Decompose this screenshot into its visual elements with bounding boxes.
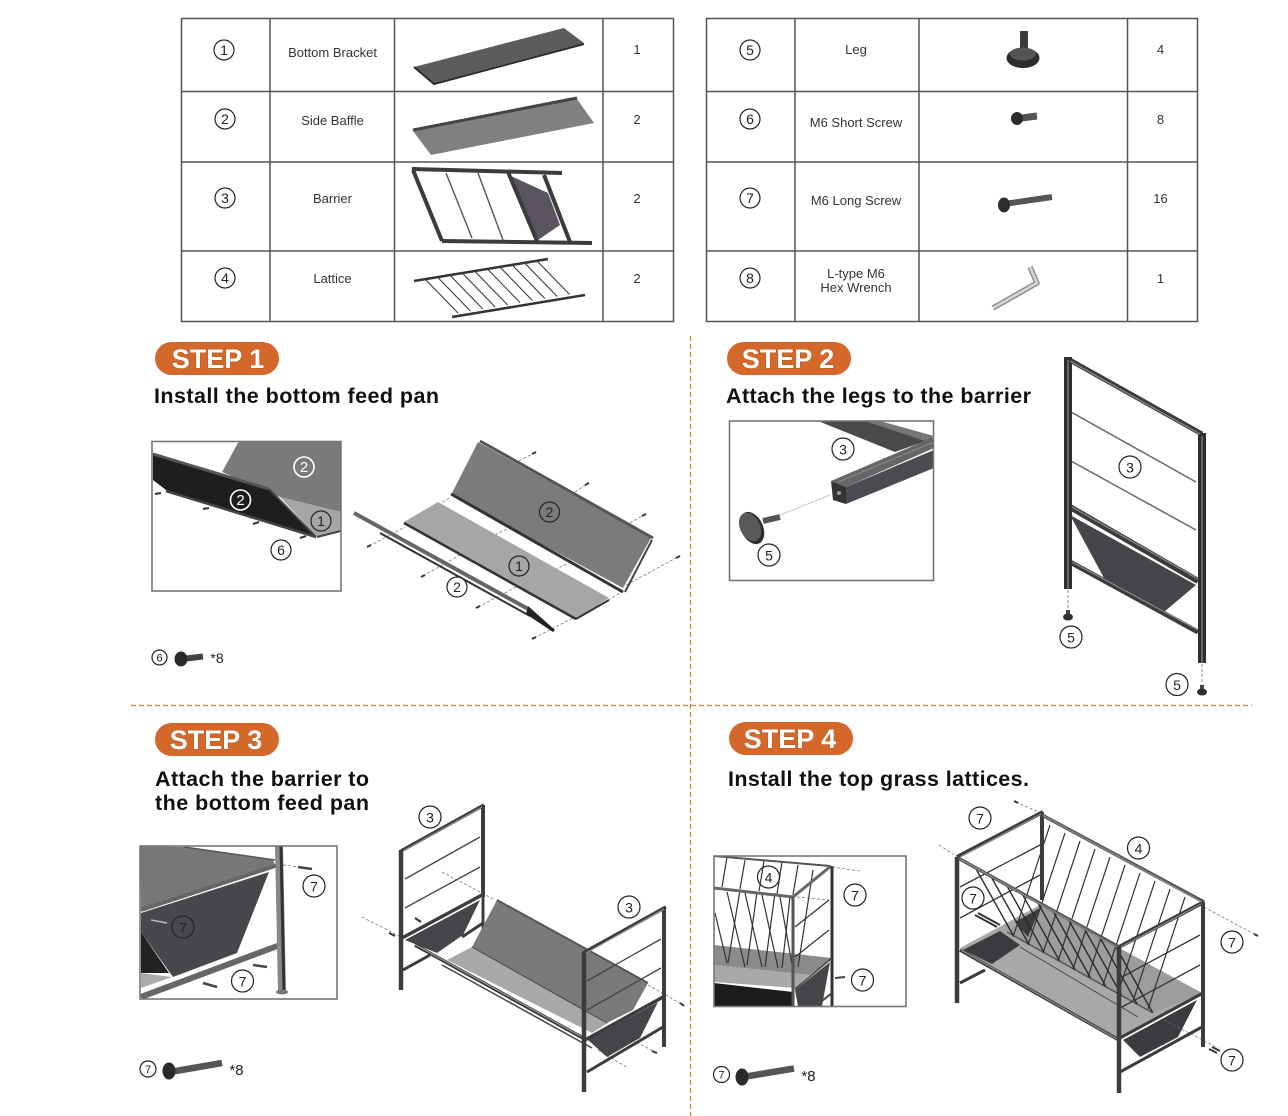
part 5 row: 4 bbox=[1157, 42, 1164, 57]
part 2 row: 2 bbox=[633, 112, 641, 127]
part 4 row: 4 bbox=[221, 270, 229, 286]
step 1 inset detail: 2 bbox=[300, 459, 308, 476]
step 1 badge: STEP 1 bbox=[172, 344, 264, 374]
panel: step 2 bbox=[726, 342, 1207, 696]
part 7 row: 7 bbox=[746, 190, 754, 206]
separators bbox=[131, 336, 1252, 1116]
step 1 inset detail: 2 bbox=[236, 492, 245, 509]
step 4 assembled view bbox=[939, 801, 1258, 1093]
part 1 row: 1 bbox=[633, 42, 641, 57]
step 1 hardware legend bbox=[152, 650, 224, 666]
step 3 assembled view: 3 bbox=[625, 900, 633, 916]
step 4 hardware legend: *8 bbox=[801, 1068, 816, 1085]
step 3 hardware legend: *8 bbox=[229, 1062, 244, 1079]
part 7 row bbox=[740, 188, 1168, 212]
leg left bbox=[1063, 610, 1073, 620]
step 4 assembled view: 7 bbox=[1228, 1052, 1236, 1068]
part 4 row: Lattice bbox=[313, 271, 352, 286]
step 4 badge: STEP 4 bbox=[744, 724, 836, 754]
step 4 hardware legend bbox=[714, 1066, 816, 1086]
step 3 assembled view: 3 bbox=[426, 810, 434, 826]
step 1 hardware legend: 6 bbox=[156, 652, 163, 664]
panel: step 4 bbox=[714, 722, 1258, 1093]
step 2 badge bbox=[727, 342, 851, 375]
step 1 exploded pan bbox=[354, 441, 680, 639]
part 7 row: M6 Long Screw bbox=[811, 193, 902, 208]
part 8 row bbox=[740, 266, 1164, 308]
front lattice bbox=[975, 867, 1152, 1012]
step 2 barrier with legs bbox=[1060, 357, 1207, 696]
step 4 inset detail bbox=[714, 856, 906, 1006]
panel: step 1 bbox=[152, 342, 680, 666]
step 3 badge: STEP 3 bbox=[170, 725, 262, 755]
step 4 heading: Install the top grass lattices. bbox=[728, 767, 1029, 791]
part 5 row: 5 bbox=[746, 42, 754, 58]
part 6 row: M6 Short Screw bbox=[810, 115, 903, 130]
step 3 inset detail: 7 bbox=[179, 920, 187, 936]
step 3 badge bbox=[155, 723, 279, 756]
leg right bbox=[1197, 685, 1207, 696]
part 2 row bbox=[215, 98, 641, 155]
part 8 row: Hex Wrench bbox=[820, 280, 892, 295]
part 8 row: L-type M6 bbox=[827, 266, 885, 281]
part 6 row: 6 bbox=[746, 111, 754, 127]
back lattice bbox=[1013, 825, 1185, 1009]
step 2 inset detail: 3 bbox=[839, 442, 847, 458]
part 6 row bbox=[740, 109, 1164, 130]
step 3 hardware legend bbox=[140, 1061, 244, 1080]
step 1 exploded pan: 1 bbox=[515, 558, 523, 574]
step 2 heading: Attach the legs to the barrier bbox=[726, 384, 1032, 408]
part 3 row: Barrier bbox=[313, 191, 353, 206]
step 3 inset detail bbox=[140, 846, 337, 999]
part 8 row: 8 bbox=[746, 270, 754, 286]
part 8 row: 1 bbox=[1157, 271, 1164, 286]
part 3 row: 3 bbox=[221, 190, 229, 206]
step 4 assembled view: 4 bbox=[1135, 840, 1143, 856]
step 4 assembled view: 7 bbox=[976, 810, 984, 826]
step 3 inset detail: 7 bbox=[239, 974, 247, 990]
step 1 hardware legend: *8 bbox=[210, 650, 224, 666]
panel: parts table left bbox=[181, 18, 674, 322]
part 3 row: 2 bbox=[633, 191, 641, 206]
part 6 row: 8 bbox=[1157, 112, 1164, 127]
step 4 hardware legend: 7 bbox=[718, 1070, 725, 1082]
step 1 inset detail: 6 bbox=[277, 542, 285, 558]
step 4 badge bbox=[729, 722, 853, 755]
part 4 row: 2 bbox=[633, 271, 641, 286]
panel: parts table right bbox=[706, 18, 1198, 322]
step 3 heading bbox=[155, 767, 369, 815]
step 2 inset detail: 5 bbox=[765, 548, 773, 564]
step 1 inset detail bbox=[152, 441, 341, 591]
step 4 assembled view: 7 bbox=[1228, 934, 1236, 950]
panel: step 3 bbox=[140, 723, 684, 1092]
part 1 row bbox=[214, 28, 641, 84]
step 3 heading: the bottom feed pan bbox=[155, 791, 369, 815]
step 3 assembled view bbox=[362, 805, 684, 1092]
part 2 row: Side Baffle bbox=[301, 113, 364, 128]
step 2 barrier with legs: 3 bbox=[1126, 460, 1134, 476]
step 4 inset detail: 7 bbox=[851, 888, 859, 904]
step 1 badge bbox=[155, 342, 279, 375]
part 3 row bbox=[215, 169, 641, 243]
part 1 row: 1 bbox=[220, 42, 228, 58]
step 1 heading: Install the bottom feed pan bbox=[154, 384, 439, 408]
step 4 inset detail: 7 bbox=[859, 972, 867, 988]
step 3 hardware legend: 7 bbox=[145, 1064, 151, 1076]
step 4 inset detail: 4 bbox=[765, 870, 773, 886]
part 4 row bbox=[215, 259, 641, 317]
part 5 row bbox=[740, 31, 1164, 68]
step 3 inset detail: 7 bbox=[310, 878, 318, 894]
step 1 exploded pan: 2 bbox=[546, 504, 554, 520]
part 7 row: 16 bbox=[1153, 191, 1168, 206]
step 3 heading: Attach the barrier to bbox=[155, 767, 369, 791]
step 1 exploded pan: 2 bbox=[453, 579, 461, 595]
step 1 inset detail: 1 bbox=[317, 513, 325, 529]
step 4 assembled view: 7 bbox=[969, 890, 977, 906]
left barrier bbox=[401, 805, 484, 990]
step 2 barrier with legs: 5 bbox=[1067, 630, 1075, 646]
step 2 badge: STEP 2 bbox=[742, 344, 834, 374]
right barrier bbox=[583, 907, 666, 1092]
step 2 inset detail bbox=[730, 421, 934, 580]
part 1 row: Bottom Bracket bbox=[288, 45, 377, 60]
part 5 row: Leg bbox=[845, 42, 867, 57]
step 2 barrier with legs: 5 bbox=[1173, 677, 1181, 693]
part 2 row: 2 bbox=[221, 111, 229, 127]
